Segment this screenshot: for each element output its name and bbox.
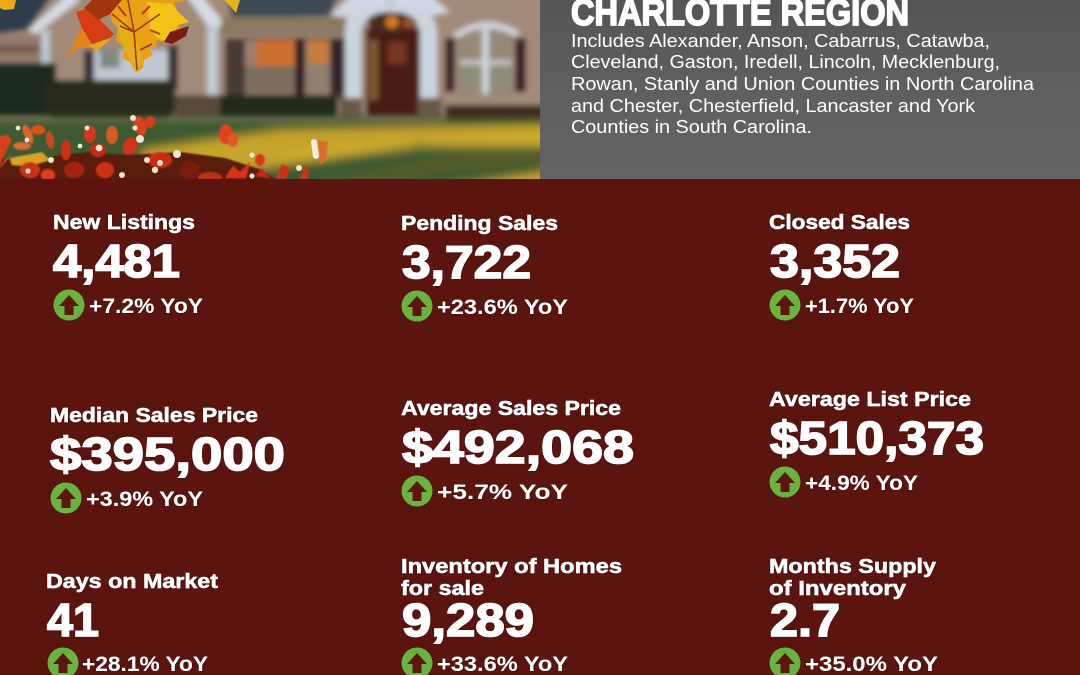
stat: Inventory of Homes for sale: for sale [401, 578, 484, 600]
icon: foreground red foliage [0, 115, 328, 184]
text block: counties included: Counties in South Carolina. [571, 117, 812, 137]
panel: region description [540, 0, 1080, 179]
stat: Median Sales Price [50, 405, 285, 514]
stat: Closed Sales: +1.7% YoY [805, 295, 914, 318]
stat: Inventory of Homes for sale: Inventory of Homes [401, 556, 622, 578]
stat: Median Sales Price: +3.9% YoY [86, 488, 203, 511]
stat: New Listings: 4,481 [53, 235, 180, 287]
stat: Months Supply of Inventory: of Inventory [769, 578, 907, 600]
stat: Average List Price: +4.9% YoY [805, 472, 918, 495]
stat: Closed Sales: 3,352 [770, 235, 900, 287]
stat: New Listings [53, 212, 203, 320]
text block: counties included: Cleveland, Gaston, Iredell, Lincoln, Mecklenburg, [571, 52, 1000, 72]
stat: Average List Price: Average List Price [769, 389, 971, 411]
stat: Pending Sales [401, 213, 568, 322]
stat: Months Supply of Inventory [769, 556, 938, 675]
stat: Pending Sales: +23.6% YoY [437, 296, 568, 319]
stat: Inventory of Homes for sale: 9,289 [402, 594, 534, 646]
stat: Average Sales Price [401, 398, 634, 506]
stat: Closed Sales [769, 212, 914, 320]
stat: Inventory of Homes for sale [401, 556, 622, 675]
lawn with sunlight [0, 112, 540, 179]
panel: stats background [0, 179, 1080, 675]
text block: counties included: and Chester, Chesterfield, Lancaster and York [571, 96, 976, 116]
stat: Months Supply of Inventory: Months Supply [769, 556, 937, 578]
stat: Average List Price [769, 389, 984, 498]
text block: counties included: Includes Alexander, Anson, Cabarrus, Catawba, [571, 31, 990, 51]
stat: New Listings: New Listings [53, 212, 195, 234]
stat: Average Sales Price: Average Sales Price [401, 398, 621, 420]
stat: Median Sales Price: $395,000 [50, 428, 285, 480]
stat: Months Supply of Inventory: 2.7 [770, 594, 840, 646]
text block: counties included: Rowan, Stanly and Union Counties in North Carolina [571, 74, 1035, 94]
stat: Closed Sales: Closed Sales [769, 212, 910, 234]
stat: Average Sales Price: $492,068 [402, 421, 634, 473]
text block: counties included [571, 31, 1035, 137]
icon: maple leaf [0, 0, 240, 73]
stat: Days on Market: 41 [47, 594, 99, 646]
stat: Pending Sales: Pending Sales [401, 213, 558, 235]
stat: Median Sales Price: Median Sales Price [50, 405, 258, 427]
stat: Average Sales Price: +5.7% YoY [437, 481, 568, 504]
stat: New Listings: +7.2% YoY [89, 295, 203, 318]
stat: Days on Market: Days on Market [46, 571, 218, 593]
white flower buds [16, 115, 319, 179]
stat: Pending Sales: 3,722 [402, 236, 531, 288]
stat: Average List Price: $510,373 [770, 412, 984, 464]
stat: Days on Market [46, 571, 218, 675]
photo: house with autumn leaves [0, 0, 540, 179]
